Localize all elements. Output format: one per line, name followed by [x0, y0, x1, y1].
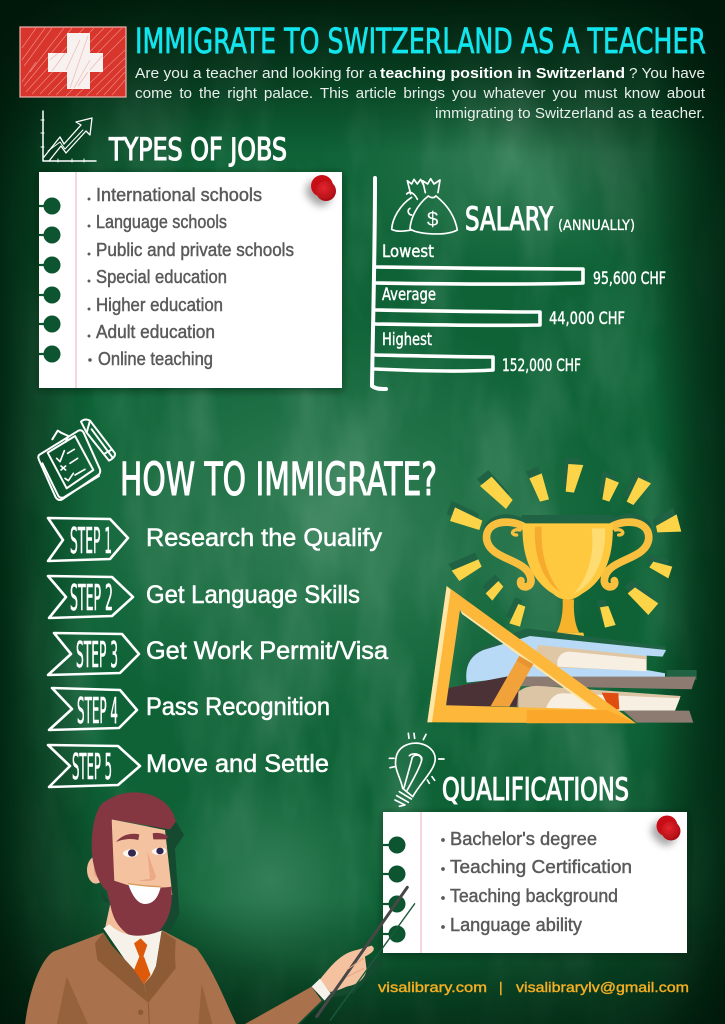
- footer contact: visalibrary.com: [378, 979, 487, 995]
- step 3: Get Work Permit/Visa: [146, 637, 388, 665]
- lapels: [95, 933, 148, 1003]
- bar chart: Average: [382, 285, 436, 305]
- books shadow: [465, 628, 667, 663]
- step 1: [48, 518, 382, 562]
- binder holes: [39, 198, 60, 362]
- panel: salary: [372, 178, 666, 389]
- step 4: STEP 4: [77, 691, 118, 732]
- intro text: Are you a teacher and looking for a: [135, 66, 378, 82]
- qualifications list: [441, 829, 632, 935]
- eyebrows: [116, 834, 139, 842]
- job list: Higher education: [96, 295, 223, 315]
- qualifications list: Language ability: [450, 915, 582, 935]
- job list: Online teaching: [98, 349, 213, 369]
- footer contact: |: [499, 979, 503, 995]
- hand: [320, 946, 374, 992]
- step 3: STEP 3: [76, 635, 118, 676]
- step 2: Get Language Skills: [146, 581, 360, 609]
- steps list: [48, 518, 388, 788]
- step 5: [48, 745, 329, 788]
- qualifications list: Teaching Certification: [450, 857, 632, 877]
- beard: [107, 881, 172, 939]
- icon: clipboard and pencil: [38, 420, 115, 500]
- pointer: [330, 903, 415, 1021]
- jacket: [25, 930, 237, 1024]
- panel: types of jobs note: [39, 172, 342, 388]
- intro text: ? You have: [629, 66, 705, 82]
- icon: red pin: [656, 816, 680, 840]
- illustration: trophy, books and set square: [427, 457, 697, 723]
- trophy cup: [523, 523, 613, 600]
- intro text: come to the right palace. This article brings you whatever you must know about: [135, 86, 705, 102]
- qualifications list: Teaching background: [450, 886, 618, 906]
- top book: [466, 636, 666, 683]
- heading: salary: SALARY: [465, 200, 553, 238]
- job list: Special education: [96, 267, 227, 287]
- head shadow: [143, 812, 184, 937]
- step 2: [48, 576, 360, 619]
- intro text: immigrating to Switzerland as a teacher.: [435, 106, 705, 122]
- heading: qualifications: QUALIFICATIONS: [442, 772, 629, 808]
- panel: qualifications note: [383, 812, 687, 953]
- trophy handles: [487, 522, 649, 587]
- heading note: annually: (ANNUALLY): [558, 218, 635, 234]
- trophy shadow: [483, 514, 652, 535]
- footer contact: [378, 979, 689, 995]
- eyes: [123, 849, 138, 857]
- button: [138, 1010, 143, 1015]
- bar chart: Highest: [382, 330, 432, 350]
- right arm sleeve: [243, 987, 322, 1024]
- hair: [92, 792, 176, 891]
- job list: International schools: [96, 185, 262, 205]
- tie: [134, 938, 151, 984]
- footer contact: visalibrarylv@gmail.com: [516, 979, 689, 995]
- set square: [427, 586, 636, 723]
- step 5: STEP 5: [72, 747, 112, 788]
- illustration: teacher: [25, 792, 415, 1024]
- job list: [88, 185, 294, 369]
- step 3: [48, 633, 388, 676]
- heading: how to immigrate: HOW TO IMMIGRATE?: [120, 453, 437, 506]
- bar chart: 95,600 CHF: [593, 269, 666, 289]
- fingers: [347, 958, 364, 977]
- shirt collar: [103, 924, 162, 993]
- icon: light bulb: [389, 733, 444, 806]
- face: [110, 819, 172, 895]
- heading: types of jobs: TYPES OF JOBS: [108, 132, 287, 168]
- step 1: STEP 1: [70, 521, 112, 562]
- icon: money bags: [392, 179, 457, 234]
- intro text: teaching position in Switzerland: [380, 66, 625, 82]
- neck: [105, 905, 160, 955]
- bar chart: 44,000 CHF: [549, 309, 625, 329]
- qualifications list: Bachelor's degree: [450, 829, 597, 849]
- bottom book: [447, 677, 696, 707]
- job list: Adult education: [96, 322, 215, 342]
- job list: Language schools: [96, 212, 227, 232]
- smile: [128, 884, 161, 904]
- nose: [138, 852, 156, 881]
- bar chart: Lowest: [382, 242, 434, 262]
- icon: money bags: $: [427, 208, 439, 231]
- icon: Swiss flag: [20, 27, 126, 97]
- step 5: Move and Settle: [146, 750, 329, 778]
- rays: [450, 464, 681, 628]
- cuff: [312, 979, 331, 1001]
- icon: rising chart: [41, 111, 96, 162]
- step 4: [49, 688, 330, 732]
- step 4: Pass Recognition: [146, 693, 330, 721]
- job list: Public and private schools: [96, 240, 294, 260]
- intro text: [135, 66, 705, 122]
- step 2: STEP 2: [70, 578, 113, 619]
- rays shadow: [447, 457, 678, 621]
- bar chart: 152,000 CHF: [502, 356, 581, 376]
- ear: [87, 856, 105, 884]
- step 1: Research the Qualify: [146, 524, 382, 552]
- bar chart: [372, 178, 666, 389]
- binder holes: [383, 837, 405, 942]
- arm shadow: [293, 958, 383, 1024]
- icon: red pin: [311, 175, 336, 201]
